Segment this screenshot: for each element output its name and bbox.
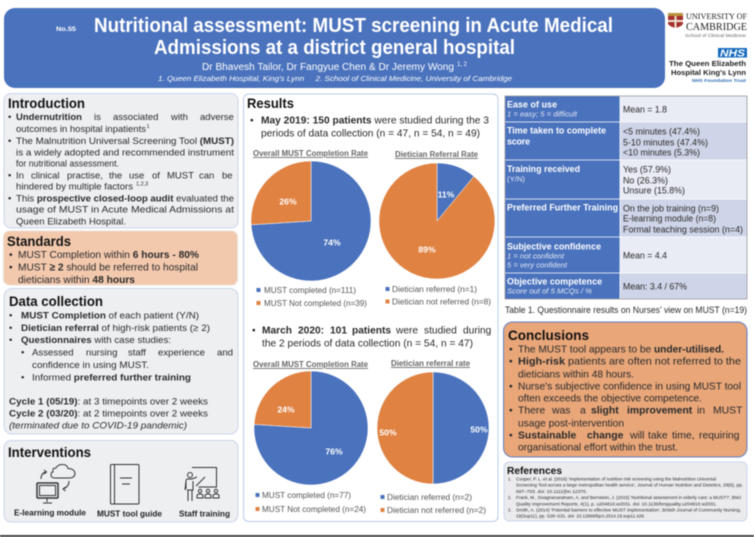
- data collection bullets: [9, 310, 233, 384]
- data collection bullets: •: [21, 372, 24, 384]
- introduction text: •: [8, 194, 11, 204]
- conclusions bullets: time,: [672, 430, 695, 442]
- logo: NHS trust: [669, 48, 747, 84]
- reference list: 2.: [508, 495, 512, 500]
- introduction text: is: [94, 112, 101, 123]
- conclusions bullets: slight: [591, 406, 619, 416]
- chart: overall completion 2020: [253, 359, 368, 514]
- logo: NHS trust: Hospital King's Lynn: [671, 68, 746, 77]
- panel: introduction: [4, 94, 238, 228]
- row: objective competence: Mean: 3.4 / 67%: [623, 282, 687, 292]
- heading: introduction: Introduction: [8, 95, 85, 111]
- conclusions bullets: There: [518, 406, 545, 416]
- chart: overall completion 2019: 26%: [279, 196, 297, 206]
- chart: overall completion 2019: 74%: [323, 238, 341, 248]
- data collection bullets: •: [21, 348, 24, 358]
- row: preferred further training: [507, 202, 743, 234]
- introduction text: is a widely adopted and recommended instrument: [16, 148, 234, 158]
- text: March 2020 cohort: the 2 periods of data collection (n = 54, n = 47): [262, 338, 473, 350]
- standards text: •: [9, 250, 13, 261]
- data collection bullets: nursing: [86, 348, 117, 358]
- text: March 2020 cohort: during: [463, 326, 492, 336]
- table: questionnaire results: [505, 96, 747, 299]
- logo: University of Cambridge: CAMBRIDGE: [686, 21, 747, 33]
- row: objective competence: [507, 276, 687, 296]
- data collection bullets: and: [217, 348, 233, 358]
- header banner: [4, 8, 665, 88]
- chart: dietician referral 2019: Dietician Referral Rate: [395, 149, 478, 159]
- heading: data collection: Data collection: [9, 293, 103, 309]
- conclusions bullets: Nurse's subjective confidence in using MUST tool: [518, 382, 741, 392]
- conclusions bullets: •: [509, 382, 513, 392]
- chart: dietician referral 2019: [379, 149, 495, 306]
- reference list: 1.: [508, 476, 512, 482]
- chart: dietician referral 2019: 11%: [438, 190, 455, 200]
- conclusions bullets: MUST: [713, 406, 743, 416]
- icon: crest: [668, 13, 683, 28]
- row: ease of use: 1 = easy; 5 = difficult: [507, 110, 578, 118]
- data collection bullets: experience: [158, 348, 205, 358]
- text: May 2019 cohort: •: [250, 116, 254, 126]
- table caption: Table 1. Questionnaire results on Nurses' view on MUST (n=19): [505, 305, 747, 315]
- introduction text: for nutritional assessment.: [16, 158, 119, 170]
- heading: results: Results: [247, 95, 294, 111]
- introduction text: practise,: [67, 170, 103, 182]
- affiliations: 1. Queen Elizabeth Hospital, King's Lynn 2. School of Clinical Medicine, University of Cambridge: [158, 74, 512, 83]
- row: preferred further training: On the job training (n=9): [623, 204, 719, 214]
- chart: dietician referral 2020: Dietician referral rate: [391, 358, 470, 368]
- conclusions bullets: •: [509, 430, 513, 442]
- heading: references: References: [507, 466, 562, 477]
- data collection cycles: [9, 396, 208, 432]
- data collection bullets: Informed preferred further training: [32, 372, 191, 384]
- row: preferred further training: Preferred Further Training: [507, 202, 618, 212]
- introduction text: with: [170, 112, 188, 123]
- data collection bullets: staff: [128, 348, 146, 358]
- conclusions bullets: a: [580, 406, 586, 416]
- standards text: •: [9, 262, 13, 274]
- row: preferred further training: E-learning module (n=8): [623, 214, 716, 224]
- chart: dietician referral 2020: 50%: [470, 424, 488, 434]
- chart: dietician referral 2019: Dietician not referred (n=8): [392, 296, 491, 306]
- row: training received: Unsure (15.8%): [623, 186, 685, 196]
- data collection bullets: •: [9, 323, 12, 334]
- panel: references: [504, 462, 747, 521]
- introduction text: can: [199, 170, 214, 182]
- reference list: 3.: [508, 508, 512, 512]
- title: Admissions at a district general hospital: [154, 37, 515, 59]
- text: March 2020 cohort: •: [252, 326, 256, 336]
- introduction text: Undernutrition: [16, 112, 82, 123]
- introduction text: use: [129, 170, 144, 182]
- conclusions bullets: usage post-intervention: [518, 418, 624, 430]
- chart: overall completion 2020: Overall MUST Completion Rate: [253, 359, 368, 369]
- chart: overall completion 2019: Overall MUST Completion Rate: [253, 148, 368, 158]
- row: time taken: <10 minutes (5.3%): [623, 148, 700, 158]
- introduction text: outcomes in hospital inpatients: [16, 124, 146, 135]
- conclusions bullets: Sustainable: [518, 430, 577, 442]
- heading: interventions: Interventions: [8, 444, 91, 460]
- conclusions bullets: was: [551, 406, 570, 416]
- row: subjective confidence: [507, 242, 667, 270]
- logo: University of Cambridge: School of Clinical Medicine: [685, 33, 746, 39]
- introduction text: [8, 112, 234, 228]
- conclusions bullets: will: [629, 430, 644, 442]
- introduction text: clinical: [31, 170, 60, 182]
- chart: overall completion 2019: [251, 148, 371, 308]
- icon: staff training: [185, 468, 219, 501]
- introduction text: •: [8, 112, 11, 123]
- chart: dietician referral 2020: Dietician referred (n=2): [387, 492, 472, 502]
- icon: e-learning: [37, 464, 75, 503]
- label: MUST tool guide: MUST tool guide: [97, 508, 162, 518]
- text: May 2019 cohort: periods of data collection (n = 47, n = 54, n = 49): [261, 128, 480, 140]
- row: subjective confidence: 5 = very confident: [507, 260, 568, 270]
- heading: conclusions: Conclusions: [508, 327, 589, 343]
- logo: NHS trust: The Queen Elizabeth: [669, 59, 746, 68]
- row: training received: No (26.3%): [623, 176, 668, 186]
- reference list: Screening Tool across a large metropolitan health service', Journal of Human Nutrition and Dietetics, 29(6), pp.: [516, 482, 743, 488]
- introduction text: The Malnutrition Universal Screening Tool (MUST): [16, 136, 234, 147]
- reference list: Cooper, P. L. et al. (2016) 'Implementation of nutrition risk screening using the Malnutrition Universal: [516, 476, 716, 482]
- data collection bullets: •: [9, 310, 12, 322]
- introduction text: the: [109, 170, 122, 182]
- chart: overall completion 2020: 76%: [325, 446, 343, 456]
- row: training received: [507, 164, 685, 196]
- row: time taken: score: [507, 136, 530, 146]
- data collection bullets: MUST Completion of each patient (Y/N): [21, 310, 199, 322]
- introduction text: usage of MUST in Acute Medical Admissions at: [16, 204, 234, 216]
- chart: dietician referral 2019: 89%: [418, 244, 436, 254]
- introduction text: •: [8, 136, 11, 147]
- conclusions bullets: •: [509, 356, 513, 368]
- introduction text: associated: [113, 112, 158, 123]
- row: preferred further training: Formal teaching session (n=4): [623, 224, 743, 234]
- row: training received: Training received: [507, 164, 580, 174]
- logo: NHS trust: NHS: [720, 48, 745, 60]
- standards text: MUST Completion within 6 hours - 80%: [18, 250, 199, 261]
- introduction text: of: [152, 170, 160, 182]
- conclusions bullets: change: [587, 430, 624, 442]
- reference list: 697–703. doi: 10.1111/jhn.12370.: [516, 489, 587, 494]
- introduction text: In: [16, 170, 24, 182]
- introduction text: adverse: [200, 112, 234, 123]
- chart: dietician referral 2020: Dietician not referred (n=2): [387, 505, 486, 515]
- label: e-learning module: E-learning module: [14, 508, 86, 518]
- poster number: No.55: [56, 26, 76, 33]
- conclusions bullets: dieticians within 48 hours.: [518, 370, 634, 380]
- row: subjective confidence: Mean = 4.4: [623, 250, 667, 260]
- row: objective competence: Objective competence: [507, 276, 602, 286]
- conclusions bullets: improvement: [627, 406, 693, 416]
- chart: overall completion 2020: MUST Not completed (n=24): [262, 504, 366, 514]
- standards text: [9, 250, 199, 286]
- introduction text: be: [222, 170, 233, 182]
- row: objective competence: Score out of 5 MCQs / %: [507, 286, 593, 296]
- text: March 2020 cohort: studied: [424, 326, 457, 336]
- row: time taken: 5-10 minutes (47.4%): [623, 138, 708, 148]
- conclusions bullets: •: [509, 344, 513, 356]
- row: training received: (Y/N): [507, 174, 525, 184]
- introduction text: Queen Elizabeth Hospital.: [16, 216, 126, 228]
- text: March 2020 cohort: 101: [330, 326, 347, 336]
- label: staff training: Staff training: [179, 508, 230, 518]
- text: March 2020 cohort: patients: [352, 326, 391, 336]
- conclusions bullets: The MUST tool appears to be under-utilised.: [518, 344, 724, 356]
- conclusions bullets: often exceeds the objective competence.: [518, 394, 702, 404]
- logo: University of Cambridge: [668, 12, 747, 39]
- chart: overall completion 2019: MUST Not completed (n=39): [264, 298, 367, 308]
- row: time taken: <5 minutes (47.4%): [623, 126, 700, 136]
- text: May 2019 cohort: [250, 116, 489, 140]
- data collection bullets: Assessed: [32, 348, 74, 358]
- data collection bullets: Questionnaires with case studies:: [21, 335, 171, 346]
- title: Nutritional assessment: MUST screening in Acute Medical: [94, 15, 613, 37]
- row: ease of use: Ease of use: [507, 100, 557, 110]
- data collection bullets: Dietician referral of high-risk patients (≥ 2): [21, 323, 210, 334]
- data collection cycles: (terminated due to COVID-19 pandemic): [9, 420, 187, 432]
- text: March 2020 cohort: March: [262, 326, 292, 336]
- chart: dietician referral 2020: [377, 358, 489, 515]
- conclusions bullets: •: [509, 406, 513, 416]
- introduction text: This prospective closed-loop audit evaluated the: [16, 194, 234, 204]
- authors: 1, 2: [457, 62, 468, 68]
- conclusions bullets: [509, 344, 743, 454]
- reference list: Smith, A. (2014) 'Potential barriers to effective MUST implementation', British Journal of Community Nursing,: [516, 508, 741, 512]
- chart: dietician referral 2020: 50%: [379, 428, 397, 438]
- data collection bullets: confidence in using MUST.: [32, 360, 149, 371]
- text: March 2020 cohort: were: [395, 326, 418, 336]
- row: training received: Yes (57.9%): [623, 164, 671, 174]
- standards text: dieticians within 48 hours: [18, 275, 135, 286]
- introduction text: •: [8, 170, 11, 182]
- reference list: [508, 476, 743, 518]
- text: March 2020 cohort: [252, 326, 492, 350]
- chart: overall completion 2019: MUST completed (n=111): [264, 285, 356, 295]
- reference list: Quality Improvement Reports, 4(1), p. u204810.w2031. doi: 10.1136/bmjquality.u204810.w2031.: [516, 502, 717, 506]
- conclusions bullets: in: [697, 406, 705, 416]
- introduction text: 1: [146, 124, 150, 130]
- data collection cycles: Cycle 2 (03/20): at 2 timepoints over 2 weeks: [9, 408, 208, 420]
- panel: standards: [4, 231, 238, 286]
- row: ease of use: Mean = 1.8: [623, 104, 667, 114]
- icon: book: [110, 464, 139, 504]
- authors: Dr Bhavesh Tailor, Dr Fangyue Chen & Dr Jeremy Wong: [202, 62, 454, 73]
- logo: NHS trust: NHS Foundation Trust: [692, 78, 746, 84]
- heading: standards: Standards: [7, 233, 71, 249]
- standards text: MUST ≥ 2 should be referred to hospital: [18, 262, 198, 274]
- row: time taken: [507, 126, 708, 158]
- introduction text: hindered by multiple factors: [16, 182, 133, 192]
- row: time taken: Time taken to complete: [507, 126, 606, 136]
- introduction text: 1,2,3: [136, 182, 148, 188]
- conclusions bullets: requiring: [699, 430, 740, 442]
- panel: results: [244, 94, 498, 522]
- panel: data collection: [4, 288, 238, 434]
- panel: conclusions: [504, 322, 747, 457]
- title: [94, 15, 613, 59]
- data collection cycles: Cycle 1 (05/19): at 3 timepoints over 2 weeks: [9, 396, 208, 408]
- chart: dietician referral 2019: Dietician referred (n=1): [392, 284, 477, 294]
- chart: overall completion 2020: 24%: [277, 404, 295, 414]
- chart: overall completion 2020: MUST completed (n=77): [262, 490, 351, 500]
- text: May 2019 cohort: May 2019: 150 patients were studied during the 3: [261, 116, 489, 126]
- logo: University of Cambridge: UNIVERSITY OF: [686, 12, 747, 21]
- reference list: Frank, M., Sivagnanaratnam, A. and Bernstein, J. (2015) 'Nutritional assessment in elderly care: a MUST?', BMJ: [516, 495, 741, 500]
- text: March 2020 cohort: 2020:: [298, 326, 324, 336]
- row: subjective confidence: Subjective confidence: [507, 242, 601, 252]
- panel: interventions: [4, 440, 238, 522]
- conclusions bullets: High-risk patients are often not referred to the: [518, 356, 741, 368]
- introduction text: MUST: [167, 170, 194, 182]
- conclusions bullets: organisational effort within the trust.: [518, 442, 678, 454]
- row: ease of use: [507, 100, 667, 118]
- row: subjective confidence: 1 = not confident: [507, 252, 565, 260]
- conclusions bullets: take: [648, 430, 668, 442]
- reference list: 19(Sup11), pp. S28–S31. doi: 10.12968/bjcn.2014.19.sup11.s28.: [516, 514, 645, 518]
- data collection bullets: •: [9, 335, 12, 346]
